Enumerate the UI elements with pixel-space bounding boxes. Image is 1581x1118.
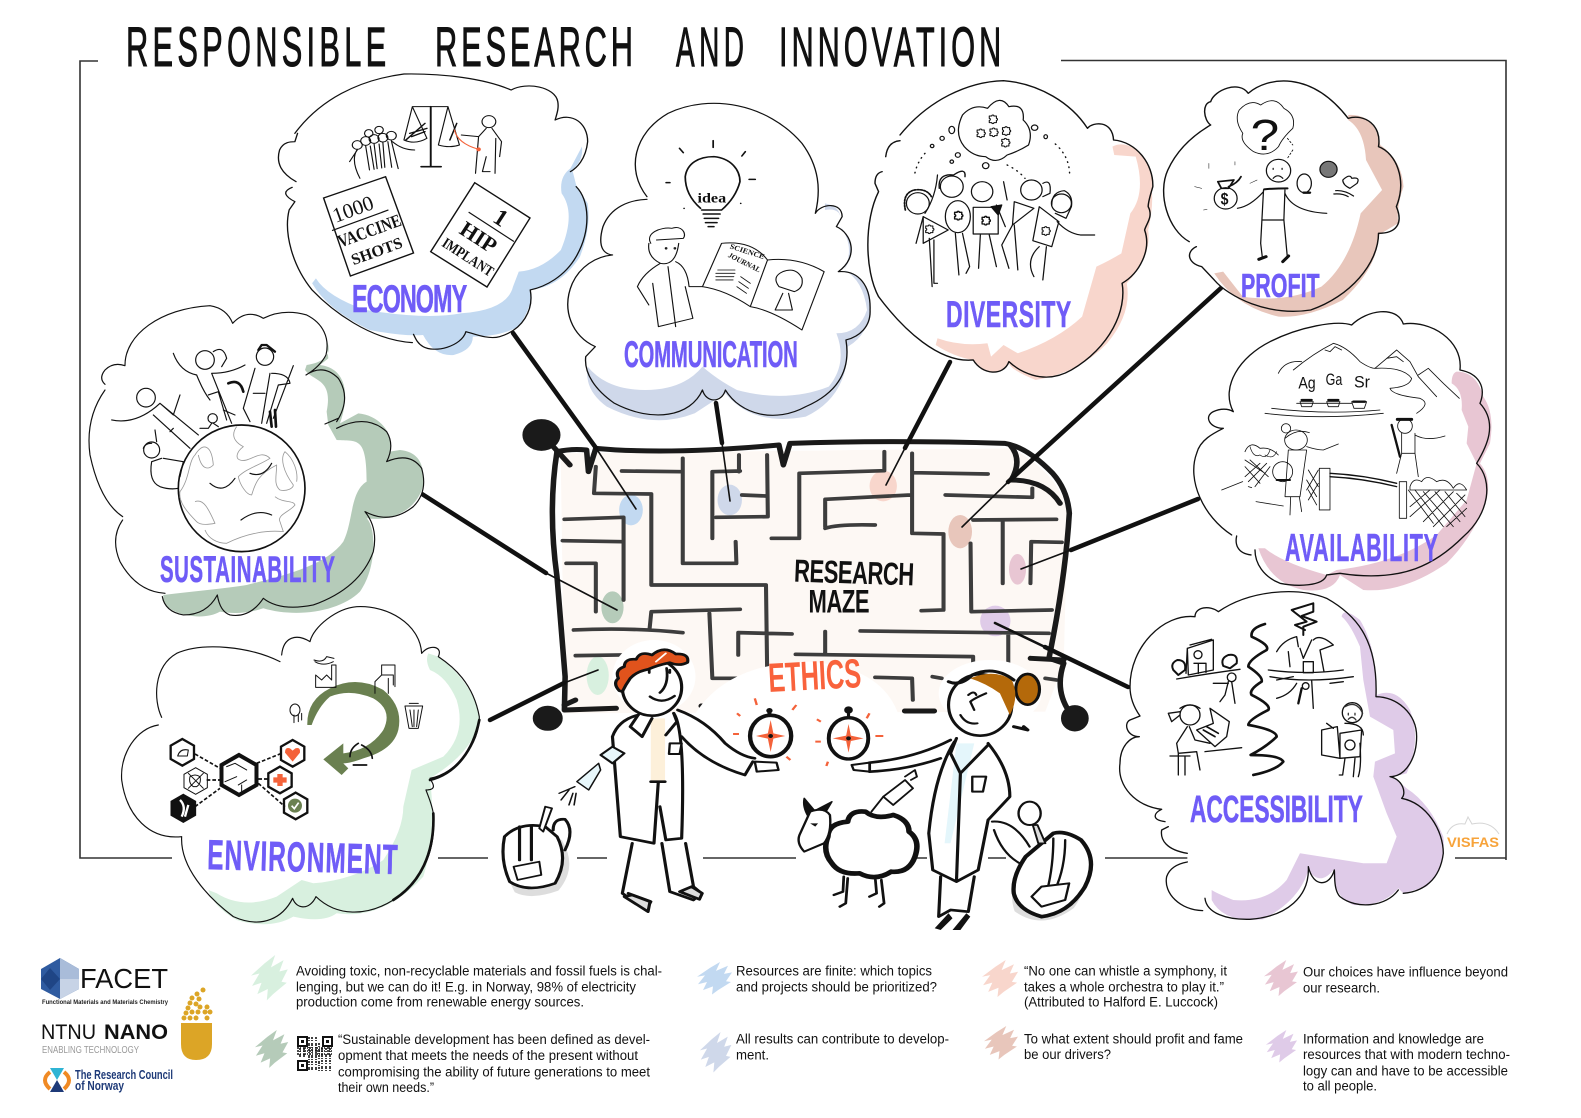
legend: sustainability note: opment that meets the needs of the present without: [338, 1048, 638, 1063]
legend: accessibility note: resources that with modern techno-: [1303, 1047, 1510, 1062]
label: environment: ENVIRONMENT: [207, 832, 398, 884]
legend: economy note: [697, 962, 937, 995]
legend: economy note: Resources are finite: which topics: [736, 964, 932, 978]
legend: environment note: [251, 955, 662, 1010]
maze label: RESEARCH: [793, 553, 915, 592]
legend: accessibility note: to all people.: [1303, 1078, 1377, 1094]
logo: NTNU NANO: [41, 1021, 168, 1056]
legend: accessibility note: [1266, 1030, 1510, 1094]
illustration: right scientist: [852, 671, 1039, 930]
legend: communication note: [700, 1032, 949, 1072]
panel: communication: [568, 103, 870, 420]
illustration: compass left: [733, 698, 796, 760]
legend: environment note: production come from renewable energy sources.: [296, 994, 584, 1010]
panel: profit: [1164, 81, 1404, 317]
panel: diversity: [868, 81, 1153, 380]
maze colour spots: [587, 471, 1026, 695]
label: communication: COMMUNICATION: [624, 335, 798, 376]
icon: person with laptop: [1168, 705, 1242, 775]
label: profit: PROFIT: [1241, 267, 1320, 304]
legend: communication note: ment.: [736, 1048, 769, 1062]
icon: earth with children: [112, 345, 305, 552]
legend: diversity note: “No one can whistle a symphony, it: [1024, 964, 1227, 978]
sign: 1 hip implant: 1: [488, 204, 512, 233]
title: [126, 15, 1001, 79]
logo: FACET: Functional Materials and Materials Chemistry: [42, 999, 168, 1006]
icon: hazard hexagons: [171, 739, 307, 822]
icon: ruined building and lightning: [1268, 603, 1353, 708]
text: chemical elements: Sr: [1354, 372, 1370, 391]
icon: diverse group of people: [905, 171, 1095, 287]
legend: sustainability note: their own needs.”: [338, 1080, 434, 1095]
scene: white halos behind characters: [612, 640, 1041, 727]
legend: sustainability note: [255, 1030, 650, 1095]
illustration: left scientist: [559, 650, 779, 912]
sign: 1000 vaccine shots: VACCINE: [335, 210, 404, 251]
sign: 1000 vaccine shots: 1000: [329, 191, 377, 228]
icon: person reading globe book: [1322, 703, 1363, 777]
maze walls: [563, 452, 1062, 700]
label: sustainability: SUSTAINABILITY: [160, 550, 335, 591]
label: diversity: DIVERSITY: [946, 293, 1072, 335]
sign: 1 hip implant: HIP: [455, 216, 502, 258]
legend: profit note: To what extent should profit and fame: [1024, 1032, 1243, 1046]
legend: profit note: be our drivers?: [1024, 1047, 1111, 1062]
legend: availability note: [1264, 960, 1508, 996]
logo: VISFAS: VISFAS: [1447, 835, 1499, 850]
panel labels: [160, 267, 1438, 884]
legend: accessibility note: Information and knowledge are: [1303, 1032, 1484, 1046]
QR code: [297, 1037, 332, 1071]
logo: NTNU NANO: NTNU: [41, 1021, 96, 1044]
icon: school and trees: [1172, 639, 1240, 703]
legend: accessibility note: logy can and have to be accessible: [1303, 1064, 1508, 1078]
icon: scales and people: [350, 107, 502, 178]
text: science journal: JOURNAL: [726, 251, 763, 274]
icon: mountains and mine carts: [1265, 343, 1459, 417]
text: chemical elements: [1298, 370, 1370, 392]
heading: ethics: ETHICS: [767, 651, 862, 702]
legend: communication note: All results can contribute to develop-: [736, 1032, 949, 1046]
label: accessibility: ACCESSIBILITY: [1190, 788, 1363, 830]
logo: The Research Council of Norway: [45, 1068, 173, 1093]
panel: economy: [278, 74, 589, 355]
text: science journal: SCIENCE: [729, 242, 766, 261]
icon: question thought cloud: [1237, 101, 1294, 160]
icon: light bulb: [666, 141, 755, 227]
icon: wavy divider: [1248, 624, 1283, 775]
title: AND: [676, 17, 744, 79]
illustration: sheep: [799, 770, 917, 907]
label: availability: AVAILABILITY: [1285, 526, 1438, 570]
maze label: [793, 553, 915, 619]
logo: FACET: FACET: [80, 963, 168, 994]
logo: NTNU NANO: ENABLING TECHNOLOGY: [42, 1045, 139, 1056]
icon: circular economy arrow: [307, 682, 399, 775]
text: idea: idea: [697, 191, 727, 206]
maze label: MAZE: [809, 583, 870, 619]
illustration: left backpack: [503, 807, 570, 896]
illustration: right backpack: [992, 802, 1091, 921]
legend: sustainability note: “Sustainable development has been defined as devel-: [338, 1032, 650, 1047]
legend: environment note: Avoiding toxic, non-recyclable materials and fossil fuels is chal-: [296, 964, 662, 978]
panel: availability: [1194, 312, 1491, 590]
maze: [525, 422, 1086, 729]
legend: environment note: lenging, but we can do it! E.g. in Norway, 98% of electricity: [296, 980, 636, 994]
logo: nano capsule: [181, 988, 212, 1060]
text: chemical elements: Ga: [1326, 370, 1343, 389]
legend: availability note: our research.: [1303, 980, 1380, 996]
icon: person with money bag and values: [1195, 159, 1358, 262]
title: INNOVATION: [779, 15, 1001, 78]
text: dollar sign: $: [1221, 189, 1229, 208]
legend: sustainability note: compromising the ability of future generations to meet: [338, 1064, 650, 1080]
connector lines: [422, 288, 1221, 720]
logo: The Research Council of Norway: of Norway: [75, 1079, 124, 1093]
legend: availability note: Our choices have influence beyond: [1303, 964, 1508, 980]
maze border: [525, 422, 1086, 729]
scene: scientists and sheep: [503, 650, 1091, 930]
panel: environment: [122, 607, 479, 924]
sign: 1 hip implant: [431, 183, 530, 287]
text: chemical elements: Ag: [1298, 373, 1316, 392]
legend: diversity note: (Attributed to Halford E. Luccock): [1024, 994, 1218, 1010]
icon: lifecycle items: [290, 657, 423, 765]
title: RESPONSIBLE: [126, 15, 386, 78]
sign: 1000 vaccine shots: [323, 177, 414, 276]
icon: scientist with journal: [637, 228, 824, 330]
sign: 1000 vaccine shots: SHOTS: [349, 235, 405, 269]
logo: The Research Council of Norway: The Research Council: [75, 1068, 173, 1082]
legend: profit note: [984, 1026, 1243, 1062]
legend: diversity note: [982, 960, 1227, 1010]
legend: diversity note: takes a whole orchestra to play it.”: [1024, 980, 1224, 994]
panel: accessibility: [1120, 592, 1444, 920]
sign: 1 hip implant: IMPLANT: [439, 235, 496, 280]
text: science journal: [726, 242, 766, 274]
logo: FACET: [41, 958, 168, 1006]
label: economy: ECONOMY: [352, 277, 467, 320]
frame: [80, 60, 1506, 860]
icon: thought cloud with puzzle pieces: [914, 100, 1070, 178]
legend: economy note: and projects should be prioritized?: [736, 980, 937, 994]
logo: NTNU NANO: NANO: [104, 1021, 168, 1044]
logo: VISFAS: [1447, 817, 1499, 850]
panel: sustainability: [89, 306, 424, 616]
icon: fence, barrier and people: [1222, 419, 1467, 527]
illustration: compass right: [815, 706, 883, 766]
icon: question thought cloud: ?: [1251, 110, 1279, 160]
title: RESEARCH: [435, 15, 633, 78]
